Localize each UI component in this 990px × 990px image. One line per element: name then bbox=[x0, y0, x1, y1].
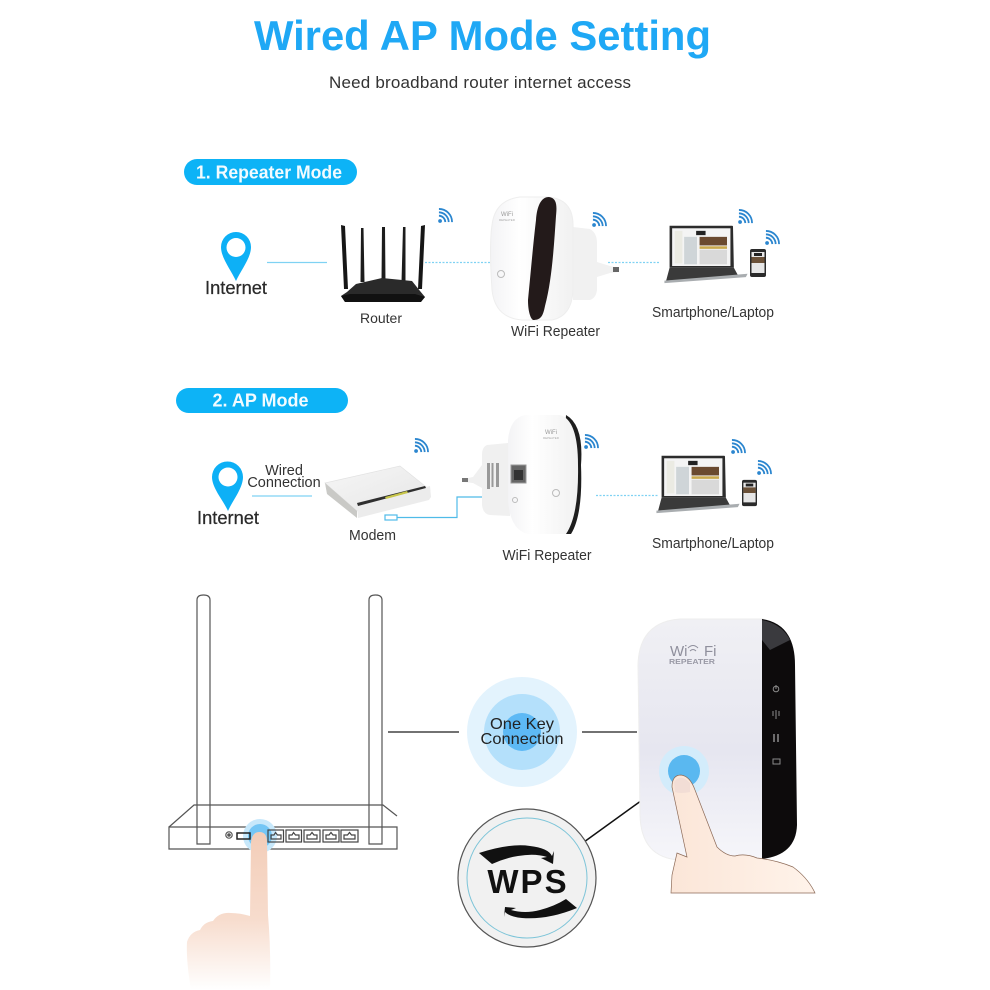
icon: modem bbox=[325, 466, 431, 518]
icon: wifi repeater bbox=[490, 197, 619, 320]
icon: laptop wifi bbox=[738, 210, 752, 224]
icon: smartphone bbox=[750, 249, 766, 277]
label: smartphone laptop: Smartphone/Laptop bbox=[652, 536, 774, 552]
label: wifi repeater: WiFi Repeater bbox=[502, 548, 592, 564]
icon: phone wifi bbox=[765, 231, 779, 245]
router button glow bbox=[243, 819, 277, 853]
icon: phone wifi bbox=[757, 461, 771, 475]
heading: repeater mode pill bbox=[184, 159, 357, 185]
connector: one key to repeater bbox=[582, 731, 637, 733]
icon: wifi repeater rear: REPEATER bbox=[543, 436, 560, 440]
panel: repeater mode bbox=[184, 159, 779, 340]
icon: modem wifi bbox=[414, 439, 428, 453]
illustration: left hand pressing button bbox=[187, 832, 270, 990]
callout: one key connection: Connection bbox=[480, 731, 564, 748]
icon: laptop bbox=[656, 456, 740, 513]
heading: repeater mode pill: 1. Repeater Mode bbox=[196, 162, 342, 182]
router ports bbox=[237, 830, 358, 842]
icon: repeater wifi bbox=[584, 435, 598, 449]
label: router: Router bbox=[360, 310, 402, 326]
illustration: wifi repeater bbox=[638, 619, 797, 860]
wifi logo text: Wi bbox=[670, 643, 688, 660]
label: internet: Internet bbox=[205, 278, 267, 298]
link: internet to router bbox=[267, 262, 327, 264]
icon: repeater wifi bbox=[592, 213, 606, 227]
subtitle: Need broadband router internet access bbox=[329, 73, 631, 92]
link: repeater to laptop bbox=[596, 494, 658, 496]
icon: laptop wifi bbox=[731, 440, 745, 454]
illustration: line-art router bbox=[169, 595, 397, 849]
label: smartphone laptop: Smartphone/Laptop bbox=[652, 305, 774, 321]
label: wired connection: Wired bbox=[265, 463, 303, 479]
title: Wired AP Mode Setting bbox=[254, 12, 711, 59]
connector: wps to button bbox=[584, 785, 663, 842]
heading: ap mode pill bbox=[176, 388, 348, 413]
panel: ap mode bbox=[176, 388, 774, 564]
panel: wps one key connection bbox=[169, 595, 815, 990]
repeater text: REPEATER bbox=[669, 657, 716, 666]
link: repeater to laptop bbox=[608, 262, 660, 264]
icon: router wifi bbox=[438, 209, 452, 223]
wifi logo text: Fi bbox=[704, 643, 716, 660]
label: modem: Modem bbox=[349, 528, 396, 544]
link: internet to modem bbox=[252, 495, 312, 497]
label: wifi repeater: WiFi Repeater bbox=[511, 324, 600, 340]
label: wired connection: Connection bbox=[247, 475, 321, 491]
illustration: right hand pressing button bbox=[671, 775, 815, 893]
icon: laptop bbox=[664, 226, 748, 283]
icon: smartphone bbox=[742, 480, 757, 506]
icon: internet pin bbox=[221, 232, 251, 281]
callout: one key connection: One Key bbox=[490, 716, 554, 733]
icon: wifi repeater rear: WiFi bbox=[545, 430, 557, 436]
heading: ap mode pill: 2. AP Mode bbox=[212, 390, 308, 410]
icon: internet pin bbox=[212, 462, 243, 511]
wifi logo text bbox=[670, 643, 716, 660]
button glow bbox=[659, 746, 709, 796]
link: router to repeater bbox=[425, 262, 491, 264]
callout: one key connection bbox=[467, 677, 577, 787]
label: internet: Internet bbox=[197, 508, 259, 528]
link: modem to repeater cable bbox=[385, 497, 486, 520]
icon: wifi repeater: REPEATER bbox=[499, 218, 516, 222]
icon: router bbox=[341, 225, 425, 302]
icon: wifi repeater: WiFi bbox=[501, 212, 513, 218]
connector: router to one key bbox=[388, 731, 459, 733]
badge: wps bbox=[458, 809, 596, 947]
status indicators bbox=[773, 685, 780, 764]
icon: wifi repeater rear bbox=[462, 415, 581, 534]
badge: wps: WPS bbox=[487, 863, 569, 900]
